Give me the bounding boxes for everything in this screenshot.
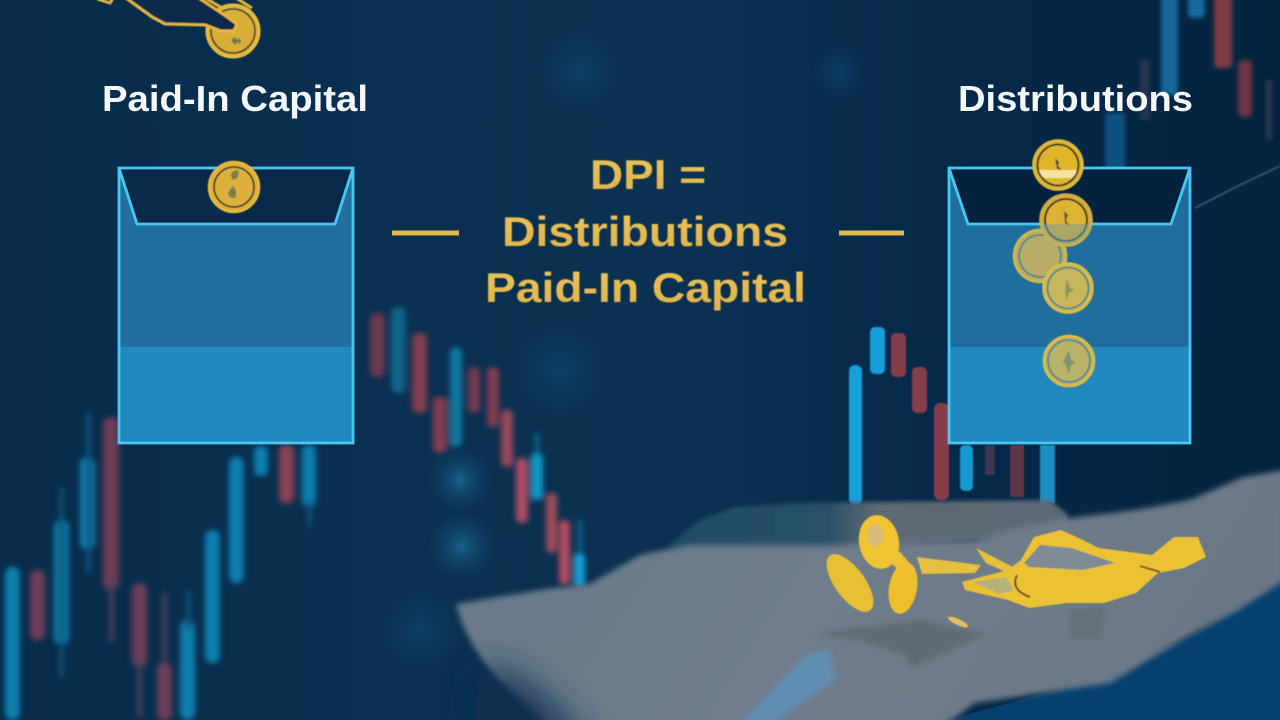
formula line: paid-in capital: Paid-In Capital: [485, 264, 806, 311]
panel: distributions box: [949, 168, 1190, 443]
coins: falling into distributions box: [1014, 140, 1094, 386]
coin 3: [1014, 230, 1066, 282]
box: outline: [949, 168, 1190, 443]
blue area under hand: [930, 575, 1280, 720]
box: outline: [119, 168, 353, 443]
left fraction dash: [392, 230, 459, 236]
hand: finger crease: [1069, 605, 1106, 640]
hand holding coins: [456, 470, 1280, 720]
label: paid-in capital: Paid-In Capital: [102, 78, 368, 119]
background glow spots: [375, 28, 868, 675]
coin 2 top half: [1038, 192, 1094, 225]
hand: fading lower-left edge: [470, 670, 590, 720]
coin: entering paid-in capital box: [209, 162, 259, 212]
formula line: distributions: Distributions: [502, 208, 788, 255]
icon: hand placing coin: [97, 0, 259, 57]
box: upper water: [119, 168, 353, 347]
coin 2 lower half: [1038, 223, 1094, 248]
right fraction dash: [839, 230, 904, 236]
box: dark opening: [949, 168, 1190, 224]
box: upper water: [949, 168, 1190, 347]
formula line: dpi: DPI =: [590, 151, 706, 198]
box: filled level: [119, 347, 353, 443]
candlestick chart: top right: [1105, 0, 1272, 223]
hand outline: [123, 0, 237, 31]
candlestick chart: right: [849, 327, 1055, 505]
label: distributions: Distributions: [958, 78, 1193, 119]
hand: palm and fingers: [456, 470, 1280, 720]
panel: paid-in capital box: [119, 168, 353, 443]
hand: back finger: [668, 500, 1070, 560]
coin 1: [1034, 140, 1082, 190]
coins in hand: [818, 512, 1206, 629]
hand: palm shadow: [815, 620, 986, 668]
coin 2 mark: [1064, 211, 1069, 226]
hand: wrist highlight: [738, 648, 835, 720]
coin in hand icon: [207, 5, 259, 57]
candlestick chart: left: [5, 413, 316, 720]
candlestick chart: centre: [370, 307, 585, 588]
coin 5: [1044, 336, 1094, 386]
coin 4: [1044, 264, 1092, 312]
formula text: [485, 151, 806, 311]
faint chart trend line: [1195, 166, 1280, 208]
box: dark opening: [119, 168, 353, 224]
box: filled level: [949, 347, 1190, 443]
